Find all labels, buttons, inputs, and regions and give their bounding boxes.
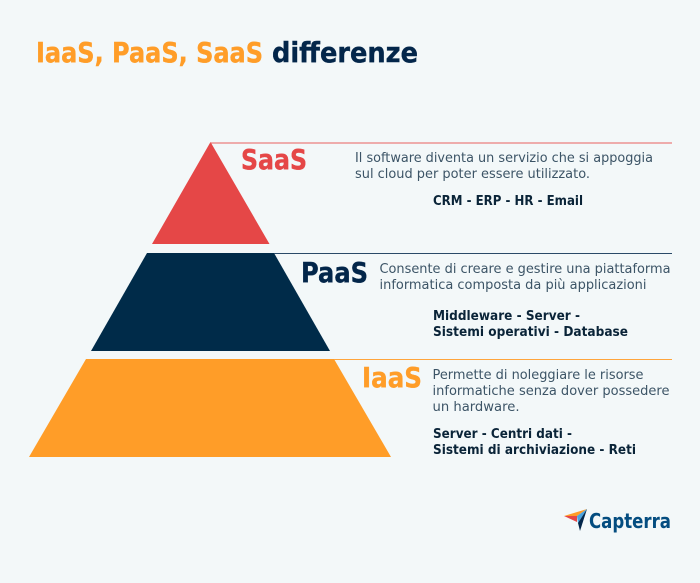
logo: Capterra: Capterra	[589, 509, 671, 533]
description: IaaS: Permette di noleggiare le risorse	[432, 367, 644, 383]
heading: PaaS: PaaS	[301, 256, 368, 289]
title: IaaS, PaaS, SaaS	[36, 36, 263, 69]
title: differenze	[272, 36, 418, 69]
description: PaaS: informatica composta da più applicazioni	[380, 277, 646, 293]
logo: Capterra	[564, 509, 671, 533]
examples: PaaS: Middleware - Server -	[433, 308, 580, 324]
examples: PaaS	[433, 308, 628, 340]
panel: PaaS	[91, 253, 672, 351]
panel: IaaS	[29, 359, 672, 458]
description: SaaS: Il software diventa un servizio che si appoggia	[355, 150, 653, 166]
description: SaaS	[355, 150, 653, 182]
pyramid tier: PaaS	[91, 253, 330, 351]
title	[36, 36, 418, 69]
description: PaaS	[380, 261, 670, 293]
description: SaaS: sul cloud per poter essere utilizzato.	[355, 166, 590, 182]
heading: IaaS: IaaS	[362, 361, 422, 394]
description: IaaS: un hardware.	[432, 399, 520, 415]
description: PaaS: Consente di creare e gestire una piattaforma	[380, 261, 670, 277]
description: IaaS: informatiche senza dover possedere	[432, 383, 670, 399]
examples: SaaS: CRM - ERP - HR - Email	[433, 193, 583, 209]
examples: PaaS: Sistemi operativi - Database	[433, 324, 628, 340]
heading: SaaS: SaaS	[241, 143, 307, 176]
examples: IaaS: Server - Centri dati -	[433, 426, 572, 442]
description: IaaS	[432, 367, 670, 415]
pyramid tier: IaaS	[29, 359, 391, 457]
panel: SaaS	[152, 142, 672, 244]
examples: IaaS: Sistemi di archiviazione - Reti	[433, 442, 636, 458]
pyramid tier: SaaS	[152, 142, 270, 244]
examples: IaaS	[433, 426, 636, 458]
